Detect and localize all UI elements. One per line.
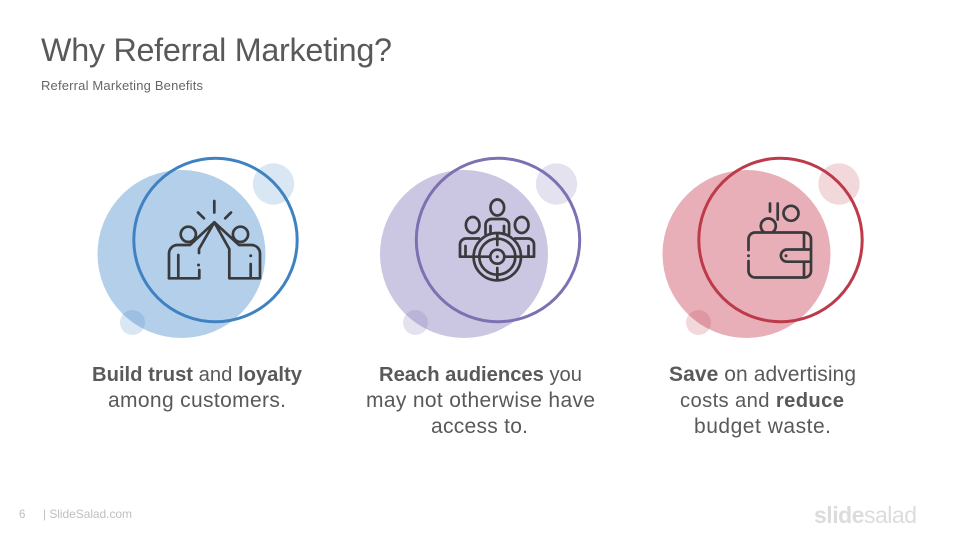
text: may not otherwise have: may not otherwise have bbox=[366, 389, 595, 412]
blue small top circle bbox=[253, 163, 294, 205]
panel: reach audiences bbox=[366, 158, 595, 438]
page number: 6 bbox=[19, 509, 25, 521]
purple ring bbox=[416, 158, 580, 322]
footer brand text: | SlideSalad.com bbox=[43, 507, 132, 521]
panel: build trust bbox=[92, 158, 303, 412]
blue filled circle bbox=[98, 170, 266, 338]
red small bottom circle bbox=[686, 310, 711, 335]
red small top circle bbox=[818, 163, 860, 205]
logo: slidesalad: slidesalad bbox=[814, 502, 917, 528]
purple small top circle bbox=[536, 163, 577, 205]
red ring bbox=[699, 158, 862, 322]
text: among customers: among customers. bbox=[108, 389, 286, 412]
icon: high five bbox=[169, 201, 260, 278]
subtitle: Referral Marketing Benefits bbox=[41, 78, 204, 93]
icon: wallet with coins bbox=[747, 204, 811, 278]
purple filled circle bbox=[380, 170, 548, 338]
title: Why Referral Marketing? bbox=[41, 32, 392, 68]
text: budget waste: budget waste. bbox=[694, 415, 831, 438]
blue ring bbox=[134, 158, 297, 322]
purple small bottom circle bbox=[403, 310, 428, 335]
icon: audience target bbox=[460, 200, 534, 280]
text: build trust: Build trust and loyalty bbox=[92, 364, 303, 386]
text: costs and reduce: costs and reduce bbox=[680, 390, 844, 412]
text: save on advertising: Save on advertising bbox=[669, 363, 856, 386]
red filled circle bbox=[662, 170, 830, 338]
panel: save on advertising bbox=[662, 158, 862, 438]
text: reach audiences: Reach audiences you bbox=[379, 364, 582, 386]
blue small bottom circle bbox=[120, 310, 145, 335]
text: access to: access to. bbox=[431, 415, 528, 438]
